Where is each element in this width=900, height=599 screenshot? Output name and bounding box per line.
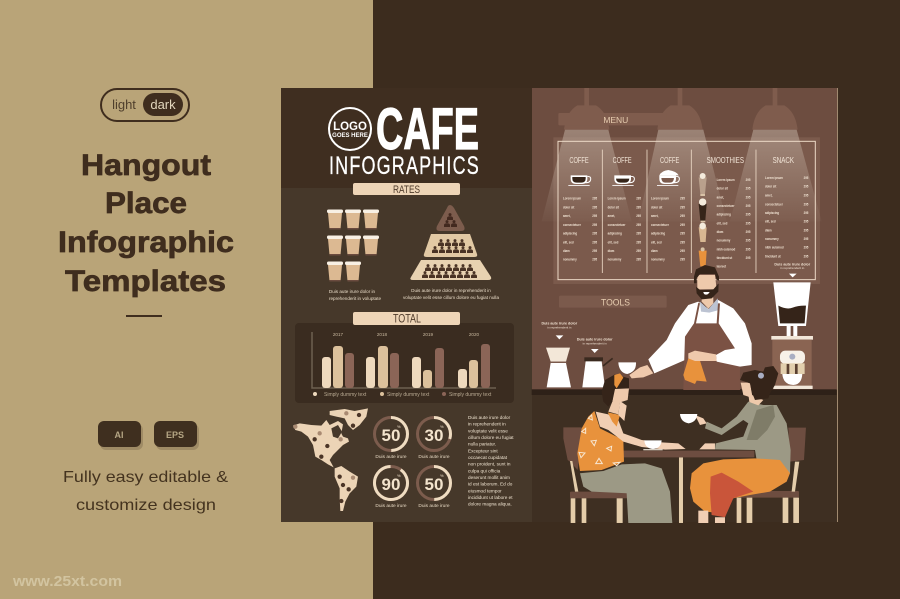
menu column smoothies: 295: [746, 230, 751, 234]
body paragraph: in reprehenderit in: [468, 422, 506, 427]
menu column snack: nibh euismod: [765, 245, 784, 250]
label: total: TOTAL: [393, 314, 421, 326]
right dark background: [373, 0, 900, 599]
barista: [618, 265, 752, 390]
donut: 50 percent second: [418, 466, 450, 509]
cup hand: [695, 415, 707, 425]
menu column smoothies: amet,: [717, 195, 724, 199]
top: [577, 411, 624, 471]
heading: INFOGRAPHICS: INFOGRAPHICS: [329, 151, 479, 180]
menu column 1: 295: [592, 231, 597, 236]
menu column smoothies: laoreet: [717, 264, 727, 269]
body paragraph: Duis aute irure dolor: [468, 415, 511, 420]
menu column 1: 295: [592, 223, 597, 227]
table: [607, 451, 754, 523]
main title: Templates: [65, 265, 226, 298]
badge: EPS: EPS: [166, 430, 184, 440]
body paragraph: [468, 415, 514, 507]
tool caption 1: [541, 322, 578, 339]
menu column smoothies: diam: [717, 230, 723, 234]
menu column 2: 295: [636, 196, 641, 201]
main title: Hangout: [81, 149, 211, 182]
tool caption 1: Duis aute irure dolor: [541, 322, 578, 326]
serving cup: [618, 362, 636, 374]
icon: turkish pot: [582, 357, 613, 387]
body paragraph: eiusmod tempor: [468, 488, 502, 493]
menu column snack: diam: [765, 228, 772, 232]
headband: [614, 373, 623, 388]
donut: 90 percent: [368, 460, 414, 509]
donut: 90 percent: %: [397, 473, 401, 478]
menu frame: [558, 141, 815, 280]
world map: [293, 408, 368, 511]
light dark toggle: [101, 89, 189, 121]
menu board: [553, 137, 820, 284]
feature description: [63, 469, 228, 514]
saucer: [643, 449, 663, 450]
menu column snack: dolor sit: [765, 184, 777, 189]
menu column smoothies: elit, sed: [717, 221, 727, 225]
scene illustration: [532, 262, 837, 523]
menu column 1: 295: [592, 249, 597, 253]
menu column 2: [608, 196, 641, 262]
menu column snack: tincidunt ut: [765, 254, 781, 258]
menu column smoothies: Lorem ipsum: [717, 178, 735, 182]
menu column 2: consectetuer: [608, 223, 626, 227]
table hand: [699, 443, 715, 449]
menu column snack: 295: [804, 254, 808, 258]
menu column 2: 295: [636, 214, 641, 218]
menu column snack: 295: [804, 211, 808, 215]
beard: [696, 283, 719, 299]
menu column smoothies: 295: [746, 178, 751, 182]
menu column 1: [563, 196, 597, 262]
menu column 2: 295: [636, 240, 641, 244]
menu column 2: 295: [636, 205, 641, 209]
menu column smoothies: adipiscing: [717, 212, 731, 217]
donut: 30 percent: Duis aute irure: [418, 454, 450, 460]
donut: 50 percent: 50: [382, 426, 400, 445]
header band: [281, 88, 532, 188]
menu column 3: diam: [651, 249, 658, 253]
cup on table: [644, 440, 662, 449]
menu column 1: elit, sed: [563, 240, 574, 244]
tools heading bar: TOOLS: [601, 298, 630, 308]
menu column smoothies: 295: [746, 195, 751, 199]
legend: Simply dummy text: [387, 392, 430, 398]
donut: 90 percent: 90: [382, 475, 400, 494]
menu column 2: 295: [636, 249, 641, 253]
hair: [740, 366, 778, 400]
donut: 30 percent: %: [440, 424, 444, 429]
menu column snack: elit, sed: [765, 219, 776, 224]
donut: 50 percent second: %: [440, 473, 444, 478]
sleeve shade: [747, 405, 775, 440]
smoothie icons: [699, 173, 707, 266]
face: [697, 275, 717, 289]
menu column 1: 295: [592, 257, 597, 262]
hair: [694, 265, 719, 283]
body paragraph: occaecat cupidatat: [468, 455, 508, 460]
logo badge: [329, 108, 371, 150]
menu column smoothies: 295: [746, 256, 751, 260]
axes: [312, 332, 496, 388]
donut: 50 percent second: Duis aute irure: [418, 503, 450, 509]
menu column 2: 295: [636, 223, 641, 227]
woman right: [680, 366, 791, 523]
menu column 1: diam: [563, 249, 570, 253]
menu column snack: amet,: [765, 193, 772, 198]
rates caption left: Duis aute irure dolor in: [329, 289, 376, 294]
rates caption right: Duis aute irure dolor in reprehenderit in: [411, 288, 491, 293]
menu column smoothies: 295: [746, 221, 751, 225]
rates caption left: reprehenderit in voluptate: [329, 296, 381, 301]
pyramid chart: [410, 205, 491, 280]
face: [608, 388, 629, 414]
logo badge: LOGO: [333, 121, 367, 133]
column headings: SMOOTHIES: [707, 155, 744, 165]
tool caption 2: Duis aute irure dolor: [577, 338, 613, 342]
apron: [683, 303, 740, 390]
menu column snack: nonummy: [765, 237, 779, 241]
body paragraph: deserunt mollit anim: [468, 475, 510, 480]
rates caption right: [403, 288, 499, 300]
menu column 3: adipiscing: [651, 231, 665, 236]
cup icons: [568, 170, 679, 186]
year labels: 2017: [333, 332, 344, 337]
left tan background: [0, 0, 373, 599]
menu column snack: adipiscing: [765, 211, 779, 215]
legend: [313, 392, 492, 398]
label: total: [353, 312, 460, 326]
icon: coffee dripper: [546, 348, 571, 387]
neck: [748, 393, 763, 405]
tool caption 2: [577, 338, 613, 353]
donut: 30 percent: [418, 418, 450, 460]
panel: cafe scene right: [532, 88, 838, 523]
arm and chest: [596, 412, 686, 450]
face: [741, 383, 753, 402]
year labels: [333, 332, 480, 337]
column dividers: [602, 150, 756, 273]
menu column smoothies: nonummy: [717, 238, 730, 243]
machine caption: Duis aute irure dolor: [774, 262, 811, 266]
body paragraph: dolore magna aliqua.: [468, 502, 512, 507]
bars: series 1: [322, 357, 467, 388]
body paragraph: Excepteur sint: [468, 448, 498, 453]
light dark toggle: dark: [150, 97, 176, 112]
column headings: COFFE: [613, 155, 632, 165]
menu column 3: 295: [680, 223, 685, 227]
bar chart panel: [295, 323, 514, 403]
menu section: [542, 88, 822, 284]
menu column 1: 295: [592, 196, 597, 201]
year labels: 2018: [377, 332, 388, 337]
main title: [58, 149, 234, 298]
menu column 2: nonummy: [608, 257, 621, 262]
rates caption right: voluptate velit esse cillum dolore eu fugiat nulla: [403, 295, 499, 300]
menu column snack: 295: [804, 219, 808, 224]
heading: CAFE: CAFE: [376, 97, 479, 162]
shirt: [648, 300, 752, 373]
feature description: Fully easy editable &: [63, 469, 228, 486]
bars: series 3: [345, 344, 490, 388]
donut: 50 percent: %: [397, 424, 401, 429]
menu column 2: amet,: [608, 214, 615, 218]
menu column 3: dolor sit: [651, 205, 663, 209]
menu column snack: consectetuer: [765, 202, 783, 206]
menu column snack: 295: [804, 184, 808, 189]
donut: 30 percent: 30: [425, 426, 443, 445]
menu column 3: amet,: [651, 214, 659, 218]
label: rates: RATES: [393, 184, 420, 196]
top pattern: [579, 415, 620, 466]
counter shelf: [532, 389, 837, 395]
menu column 3: 295: [680, 240, 685, 244]
menu column 2: elit, sed: [608, 240, 618, 244]
menu column 1: Lorem ipsum: [563, 196, 581, 201]
menu column 3: Lorem ipsum: [651, 196, 669, 201]
watermark: www.25xt.com: [12, 573, 122, 590]
menu column smoothies: 295: [746, 247, 751, 251]
label: rates: [353, 183, 460, 196]
legend: Simply dummy text: [449, 392, 492, 398]
body paragraph: culpa qui officia: [468, 468, 501, 473]
skirt: [580, 463, 672, 523]
year labels: 2019: [423, 332, 434, 337]
column headings: COFFE: [660, 155, 680, 165]
main title: Place: [105, 187, 187, 220]
menu column 2: dolor sit: [608, 205, 620, 209]
hand on towel: [688, 351, 717, 361]
menu column smoothies: 295: [746, 204, 751, 208]
menu column smoothies: 295: [746, 212, 751, 217]
main title: Infographic: [58, 226, 234, 259]
tool caption 2: in reprehenderit in: [583, 342, 607, 346]
menu column 1: dolor sit: [563, 205, 575, 209]
towel: [683, 358, 707, 384]
body paragraph: nulla pariatur.: [468, 442, 496, 447]
serving hand: [629, 365, 653, 378]
menu column 3: 295: [680, 249, 685, 253]
icon chart: coffee cups: [327, 210, 379, 282]
menu column 3: 295: [680, 257, 685, 262]
menu column snack: 295: [804, 237, 808, 241]
hanging lamps: [542, 88, 822, 221]
hair tie: [758, 373, 764, 379]
hair: [602, 374, 629, 407]
woman left: [577, 373, 686, 523]
donut: 50 percent: Duis aute irure: [375, 454, 407, 460]
menu column smoothies: tincidunt ut: [717, 256, 733, 260]
body paragraph: incididunt ut labore et: [468, 495, 513, 500]
cup: [680, 414, 697, 423]
tool caption 1: in reprehenderit in: [547, 326, 572, 330]
menu column snack: 295: [804, 245, 808, 250]
coffee machine: [771, 282, 813, 389]
menu column 3: 295: [680, 205, 685, 209]
menu column 1: nonummy: [563, 257, 577, 262]
menu column smoothies: [717, 178, 751, 269]
menu heading bar: MENU: [603, 115, 628, 125]
chin hand: [618, 401, 627, 421]
menu column 1: adipiscing: [563, 231, 577, 236]
pants: [690, 458, 790, 513]
neck: [702, 297, 713, 309]
donut: 90 percent: Duis aute irure: [375, 503, 407, 509]
menu column 2: adipiscing: [608, 231, 622, 236]
body paragraph: id est laborum. Ed do: [468, 482, 513, 487]
light dark toggle: light: [112, 97, 136, 112]
smile: [703, 292, 710, 295]
tools heading bar: [559, 296, 667, 308]
body paragraph: voluptate velit esse: [468, 428, 508, 433]
feature description: customize design: [76, 497, 216, 514]
rates caption left: [329, 289, 381, 301]
body paragraph: non proident, sunt in: [468, 462, 511, 467]
menu column snack: 295: [804, 228, 808, 232]
badge: AI: [98, 421, 143, 450]
menu column 2: 295: [636, 231, 641, 236]
menu column smoothies: consectetuer: [717, 204, 735, 208]
feet: [698, 511, 725, 523]
menu column snack: 295: [804, 202, 808, 206]
column headings: COFFE: [569, 155, 589, 165]
menu column 2: 295: [636, 257, 641, 262]
menu column snack: 295: [804, 193, 808, 198]
menu column 3: 295: [680, 231, 685, 236]
collar: [700, 298, 719, 313]
legend: Simply dummy text: [324, 392, 367, 398]
badge: EPS: [154, 421, 199, 450]
badge: AI: AI: [114, 430, 124, 440]
menu column 3: [651, 196, 685, 262]
menu column smoothies: 295: [746, 238, 751, 243]
donut: 50 percent: [374, 418, 408, 460]
year labels: 2020: [469, 332, 480, 337]
menu column snack: [765, 176, 808, 258]
menu column 3: nonummy: [651, 257, 665, 262]
left chair: [563, 427, 628, 523]
bars: series 2: [333, 346, 478, 388]
donut: 50 percent second: 50: [425, 475, 443, 494]
menu column smoothies: 295: [746, 186, 751, 191]
menu column 1: 295: [592, 205, 597, 209]
menu column 2: diam: [608, 249, 614, 253]
menu column 2: Lorem ipsum: [608, 196, 626, 201]
menu column 3: 295: [680, 196, 685, 201]
machine caption: [774, 262, 811, 277]
menu column 3: elit, sed: [651, 240, 662, 244]
sweater: [705, 402, 791, 473]
menu column 1: amet,: [563, 214, 571, 218]
title underline: [126, 315, 162, 317]
logo badge: GOES HERE: [332, 133, 368, 139]
body paragraph: cillum dolore eu fugiat: [468, 435, 514, 440]
neck strap: [608, 412, 620, 427]
menu column 1: 295: [592, 214, 597, 218]
menu column 3: 295: [680, 214, 685, 218]
column headings: SNACK: [773, 155, 794, 165]
menu column smoothies: dolor sit: [717, 186, 729, 191]
menu column snack: Lorem ipsum: [765, 176, 783, 180]
column headings: [569, 155, 794, 165]
menu column 1: consectetuer: [563, 223, 581, 227]
menu column 3: consectetuer: [651, 223, 669, 227]
menu heading bar: [558, 113, 667, 125]
right chair: [737, 428, 806, 523]
menu column snack: 295: [804, 176, 808, 180]
menu column smoothies: nibh euismod: [717, 247, 735, 251]
panel: infographic left: [281, 88, 532, 522]
red pant leg: [710, 473, 753, 517]
menu column 1: 295: [592, 240, 597, 244]
machine caption: in reprehenderit in: [780, 266, 805, 270]
